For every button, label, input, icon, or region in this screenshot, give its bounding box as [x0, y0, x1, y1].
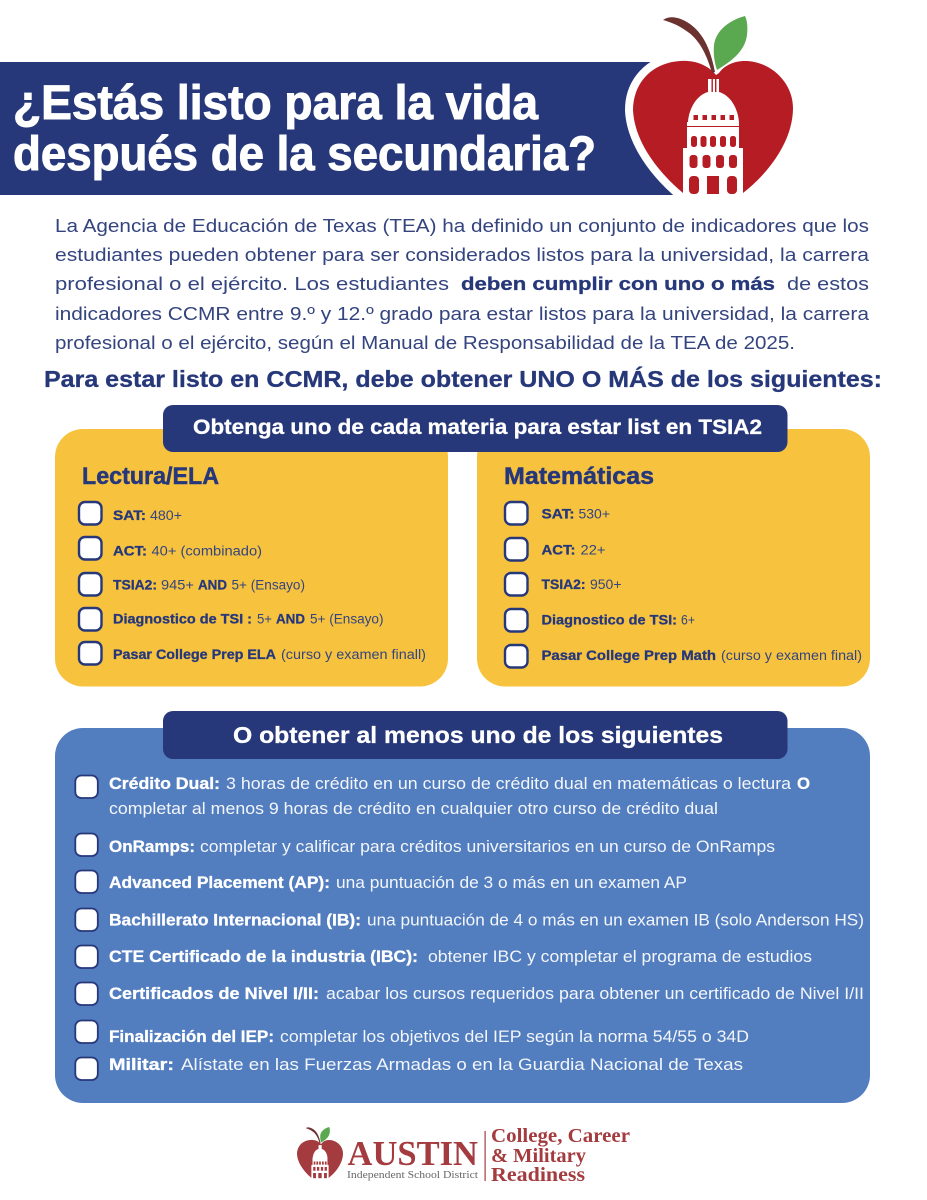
item: OnRamps — [75, 834, 775, 856]
item: ACT math: ACT: — [542, 542, 576, 558]
item: TSI diagnostic math: Diagnostico de TSI: — [542, 612, 677, 628]
logo department name: Readiness — [491, 1165, 585, 1186]
item: Militar: Militar: — [109, 1056, 174, 1074]
item: Bachillerato Internacional: Bachillerato Internacional (IB): — [109, 912, 361, 930]
intro paragraph — [55, 215, 870, 353]
intro paragraph: estudiantes pueden obtener para ser considerados listos para la universidad, la carrera — [55, 244, 870, 265]
footer logo — [297, 1126, 630, 1186]
icon: small apple — [297, 1127, 343, 1178]
item: TSI diagnostic math: 6+ — [681, 612, 695, 628]
item: College Prep ELA: Pasar College Prep ELA — [113, 647, 276, 662]
item: College Prep Math — [505, 645, 862, 668]
title: ¿Estás listo para la vida — [13, 77, 538, 130]
item: SAT math: SAT: — [542, 506, 574, 522]
item: ACT reading: ACT: — [113, 544, 147, 558]
panel: other indicators — [55, 711, 870, 1103]
intro paragraph: deben cumplir con uno o más — [461, 273, 775, 294]
icon: apple with capitol — [633, 16, 840, 207]
item: Certificados de Nivel: acabar los cursos requeridos para obtener un certificado de Nivel I/II — [326, 985, 864, 1003]
intro paragraph: profesional o el ejército. Los estudiantes — [55, 273, 449, 294]
item: Certificados de Nivel — [75, 982, 864, 1005]
banner: TSIA2 heading: Obtenga uno de cada materia para estar list en TSIA2 — [193, 416, 762, 439]
item: Advanced Placement: Advanced Placement (AP): — [109, 874, 330, 892]
item: TSI diagnostic math — [505, 609, 695, 632]
item: Finalización del IEP — [75, 1020, 749, 1046]
title: después de la secundaria? — [13, 128, 596, 181]
item: College Prep ELA — [79, 642, 426, 664]
item: ACT math — [505, 538, 606, 560]
intro paragraph: profesional o el ejército, según el Manual de Responsabilidad de la TEA de 2025. — [55, 332, 795, 353]
item: TSIA2 math: 950+ — [590, 577, 622, 592]
item: Crédito Dual: Crédito Dual: — [109, 775, 220, 793]
item: OnRamps: completar y calificar para créditos universitarios en un curso de OnRamps — [200, 838, 775, 856]
item: CTE IBC: CTE Certificado de la industria (IBC): — [109, 948, 418, 966]
item: Crédito Dual: 3 horas de crédito en un curso de crédito dual en matemáticas o lectura — [226, 775, 792, 793]
item: College Prep ELA: (curso y examen finall) — [281, 647, 426, 662]
item: Crédito Dual: O — [797, 775, 810, 793]
item: SAT reading: 480+ — [150, 508, 182, 523]
item: Militar: Alístate en las Fuerzas Armadas o en la Guardia Nacional de Texas — [181, 1056, 743, 1074]
logo wordmark: Independent School District — [347, 1170, 478, 1181]
item: Finalización del IEP: completar los objetivos del IEP según la norma 54/55 o 34D — [280, 1028, 749, 1046]
item: Finalización del IEP: Finalización del IEP: — [109, 1028, 274, 1046]
intro paragraph: indicadores CCMR entre 9.º y 12.º grado para estar listos para la universidad, la carrera — [55, 303, 870, 324]
item: ACT math: 22+ — [580, 542, 606, 558]
banner: other indicators heading: O obtener al menos uno de los siguientes — [233, 722, 723, 748]
heading: Matemáticas: Matemáticas — [504, 463, 654, 490]
item: Crédito Dual — [75, 775, 810, 818]
item: SAT math: 530+ — [578, 506, 610, 522]
panel: Lectura/ELA — [55, 429, 448, 686]
item: ACT reading — [79, 537, 262, 560]
item: Crédito Dual: completar al menos 9 horas de crédito en cualquier otro curso de crédito dual — [109, 800, 718, 818]
item: Militar — [75, 1056, 743, 1080]
panel: Matemáticas — [477, 429, 870, 686]
item: TSI diagnostic reading — [79, 608, 384, 630]
item: TSIA2 reading — [79, 573, 305, 596]
intro paragraph: de estos — [787, 273, 869, 294]
item: TSIA2 math: TSIA2: — [542, 577, 586, 592]
title — [13, 77, 596, 181]
heading: CCMR requirement: Para estar listo en CCMR, debe obtener UNO O MÁS de los siguientes: — [44, 365, 882, 392]
item: CTE IBC — [75, 946, 812, 968]
item: SAT reading — [79, 502, 182, 524]
header banner — [0, 62, 673, 195]
item: SAT math — [505, 502, 610, 524]
item: Bachillerato Internacional: una puntuación de 4 o más en un examen IB (solo Anderson HS) — [367, 912, 864, 930]
item: Certificados de Nivel: Certificados de Nivel I/II: — [109, 985, 319, 1003]
item: College Prep Math: (curso y examen final) — [721, 648, 862, 663]
logo wordmark: AUSTIN — [348, 1134, 478, 1173]
item: TSIA2 reading: 5+ (Ensayo) — [232, 578, 305, 592]
heading: Lectura/ELA: Lectura/ELA — [82, 463, 219, 490]
logo department name — [491, 1126, 630, 1186]
item: OnRamps: OnRamps: — [109, 838, 195, 856]
logo department name: & Military — [491, 1146, 586, 1167]
item: Advanced Placement: una puntuación de 3 o más en un examen AP — [336, 874, 687, 892]
item: SAT reading: SAT: — [113, 508, 146, 523]
intro paragraph: La Agencia de Educación de Texas (TEA) ha definido un conjunto de indicadores que los — [55, 215, 869, 236]
item: TSI diagnostic reading: Diagnostico de TSI : — [113, 612, 252, 626]
item: TSI diagnostic reading: AND — [276, 612, 305, 626]
item: TSIA2 reading: AND — [198, 578, 227, 592]
item: ACT reading: 40+ (combinado) — [152, 544, 262, 558]
banner: TSIA2 heading — [163, 405, 788, 452]
item: CTE IBC: obtener IBC y completar el programa de estudios — [428, 948, 812, 966]
item: TSI diagnostic reading: 5+ (Ensayo) — [310, 612, 384, 626]
item: TSIA2 math — [505, 573, 622, 596]
logo department name: College, Career — [491, 1126, 630, 1147]
item: TSIA2 reading: 945+ — [161, 578, 194, 592]
item: Advanced Placement — [75, 870, 687, 893]
item: TSI diagnostic reading: 5+ — [257, 612, 272, 626]
item: Bachillerato Internacional — [75, 908, 864, 931]
banner: other indicators heading — [163, 711, 788, 759]
item: College Prep Math: Pasar College Prep Math — [542, 648, 716, 663]
item: TSIA2 reading: TSIA2: — [113, 578, 157, 592]
